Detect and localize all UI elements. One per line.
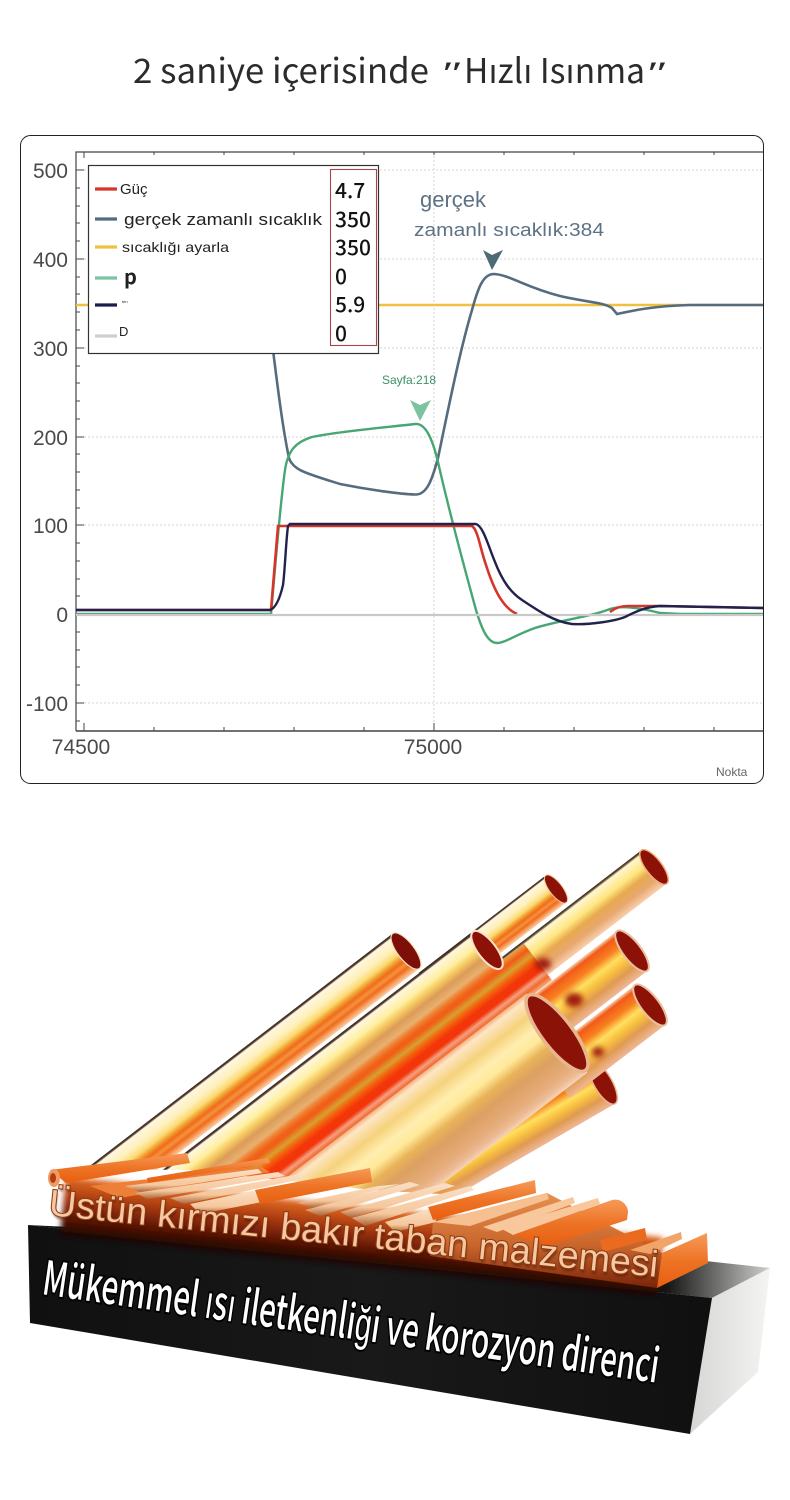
fin dark band	[60, 1177, 663, 1299]
legend values	[335, 175, 371, 348]
legend values: 350	[335, 232, 371, 262]
legend labels: D	[119, 324, 128, 339]
fin floor right	[430, 1193, 662, 1288]
legend values: 4.7	[335, 175, 365, 205]
tube: centre	[162, 930, 504, 1170]
line: I	[76, 524, 763, 624]
x axis labels: 75000	[404, 736, 462, 759]
legend values: 5.9	[335, 289, 365, 319]
fin stripes back	[90, 1158, 270, 1198]
tube: right upper	[536, 929, 650, 1028]
legend labels: Güç	[120, 181, 148, 198]
tube: right lower	[564, 983, 668, 1098]
title: ′′	[443, 57, 462, 90]
chart frame	[20, 136, 764, 784]
legend labels: gerçek zamanlı sıcaklık	[124, 211, 323, 229]
y axis labels: 300	[33, 338, 68, 361]
legend labels: sıcaklığı ayarla	[122, 239, 229, 255]
callout: peak real-time temperature: gerçek	[420, 187, 487, 212]
x axis labels: 74500	[52, 736, 110, 759]
legend values: 350	[335, 204, 371, 234]
illustration: copper tubes	[91, 848, 669, 1194]
y axis labels: -100	[26, 693, 68, 716]
fin stripes left	[125, 1169, 307, 1214]
line: real-time temperature	[273, 274, 763, 495]
callout: peak P	[382, 373, 436, 421]
grid lines	[76, 152, 763, 731]
block side face	[690, 1268, 770, 1434]
tube: small back	[418, 874, 568, 974]
legend value box	[330, 170, 376, 346]
y axis labels: 0	[56, 604, 68, 627]
fin bright 2	[255, 1168, 372, 1204]
title	[133, 44, 667, 93]
callout: peak real-time temperature: zamanlı sıcaklık:384	[414, 219, 604, 240]
line: power	[76, 526, 763, 614]
callout: peak P: Sayfa:218	[382, 373, 436, 387]
illustration: copper fins	[48, 1153, 708, 1299]
tube dents	[535, 958, 604, 1057]
legend	[88, 166, 378, 354]
block front face	[28, 1225, 712, 1434]
caption: copper material: Üstün kırmızı bakır taban malzemesi	[47, 1182, 660, 1285]
panel: chart	[20, 136, 764, 784]
illustration: base block	[28, 1225, 770, 1434]
fin bright 3	[428, 1180, 536, 1220]
fin peach right	[433, 1193, 682, 1254]
caption: copper material: Üstün kırmızı bakır taban malzemesi	[48, 1185, 661, 1288]
chart axes and ticks	[76, 152, 763, 731]
fin end	[657, 1233, 708, 1288]
tube: large front	[288, 992, 590, 1192]
legend values: 0	[335, 261, 347, 291]
y axis labels: 500	[33, 160, 68, 183]
legend values: 0	[335, 318, 347, 348]
callout: peak real-time temperature	[414, 187, 604, 270]
axis unit label: Nokta	[716, 765, 748, 779]
fin roll	[48, 1153, 190, 1187]
y axis labels: 100	[33, 515, 68, 538]
line: set temperature	[76, 304, 763, 306]
legend swatches	[95, 189, 117, 336]
tube: middle red band	[240, 944, 552, 1179]
title: ′′	[648, 57, 667, 90]
title: Hızlı Isınma	[464, 44, 645, 93]
y axis labels: 400	[33, 249, 68, 272]
legend labels: p	[124, 261, 137, 290]
x axis labels	[52, 736, 462, 759]
line: D	[76, 614, 763, 616]
tube: back low	[398, 1070, 618, 1194]
fin stripes centre	[297, 1182, 474, 1232]
y axis labels: 200	[33, 427, 68, 450]
legend labels: ten	[122, 299, 128, 304]
legend box	[88, 166, 378, 354]
tube: long back	[246, 848, 669, 1179]
line: P	[76, 424, 763, 643]
block top face	[28, 1225, 770, 1298]
title: 2 saniye içerisinde	[133, 44, 429, 93]
legend labels	[119, 181, 323, 339]
tube: left	[91, 932, 422, 1170]
y axis labels	[26, 160, 68, 716]
